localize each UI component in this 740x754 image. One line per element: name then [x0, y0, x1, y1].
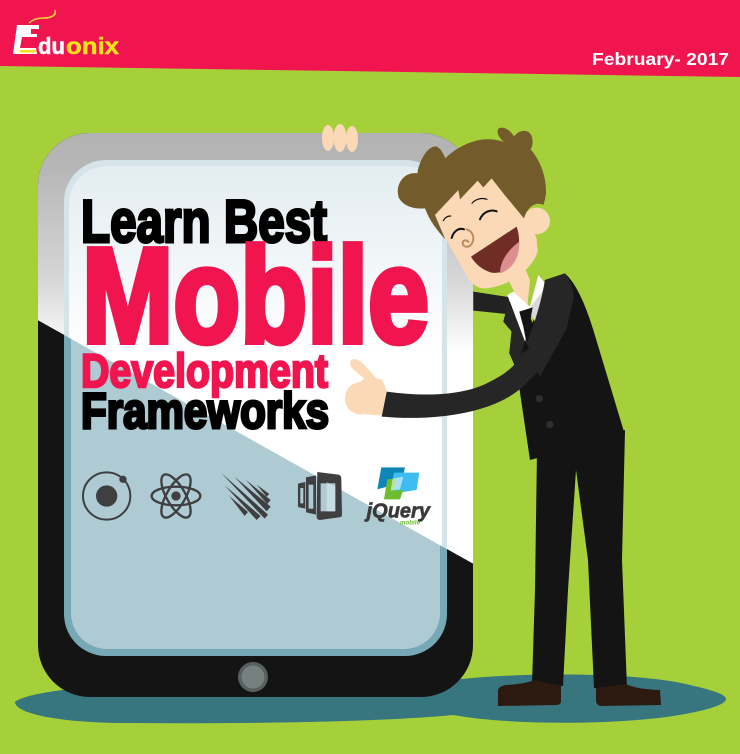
- hair: [398, 128, 546, 239]
- Learn Best: Learn Best: [81, 188, 327, 255]
- nose: [463, 229, 473, 247]
- icon: Ionic: [83, 472, 130, 520]
- businessman character: [345, 128, 661, 706]
- tablet body and screen: light upper half: [38, 133, 473, 564]
- trousers: [532, 430, 627, 688]
- logo: Eduonix: du: [38, 33, 65, 59]
- tablet body: dark lower half: [38, 133, 473, 697]
- tongue: [500, 242, 519, 273]
- head: [398, 128, 550, 288]
- neck: [508, 268, 530, 313]
- back arm: [473, 292, 510, 314]
- eyes and brows: [443, 199, 497, 238]
- Frameworks: Frameworks: [81, 383, 329, 439]
- logo: Eduonix: [13, 10, 119, 59]
- logo: jQuery mobile: jQuery: [364, 500, 431, 522]
- jacket buttons: [536, 395, 543, 402]
- floor shadow: [15, 675, 726, 723]
- face: [435, 178, 538, 288]
- ear: [523, 208, 550, 234]
- logo: jQuery mobile: [364, 467, 431, 527]
- necktie: [519, 307, 537, 347]
- logo: jQuery mobile: mobile: [400, 520, 420, 527]
- headline: [81, 188, 429, 439]
- tablet screen: lower half: [64, 160, 447, 656]
- shoes: [498, 680, 661, 706]
- upper body traced in zoom coordinates: [345, 128, 625, 460]
- Development: Development: [81, 344, 328, 397]
- tablet: [38, 133, 473, 697]
- date: February- 2017: [592, 49, 729, 69]
- icon: React: [152, 470, 200, 522]
- jacket lapel: [527, 273, 574, 377]
- home button: [238, 662, 268, 692]
- fingers holding the tablet: [322, 124, 358, 152]
- jacket: [503, 273, 625, 460]
- header band: [0, 0, 740, 77]
- framework icons row: [83, 467, 431, 527]
- front arm: [382, 328, 567, 418]
- icon: PhoneGap: [298, 472, 342, 520]
- pointing hand: [345, 359, 387, 416]
- Mobile: Mobile: [82, 220, 429, 371]
- icon: Meteor: [221, 473, 271, 520]
- mouth: [471, 227, 519, 273]
- shirt collar: [507, 275, 545, 342]
- logo: Eduonix: onix: [66, 33, 119, 59]
